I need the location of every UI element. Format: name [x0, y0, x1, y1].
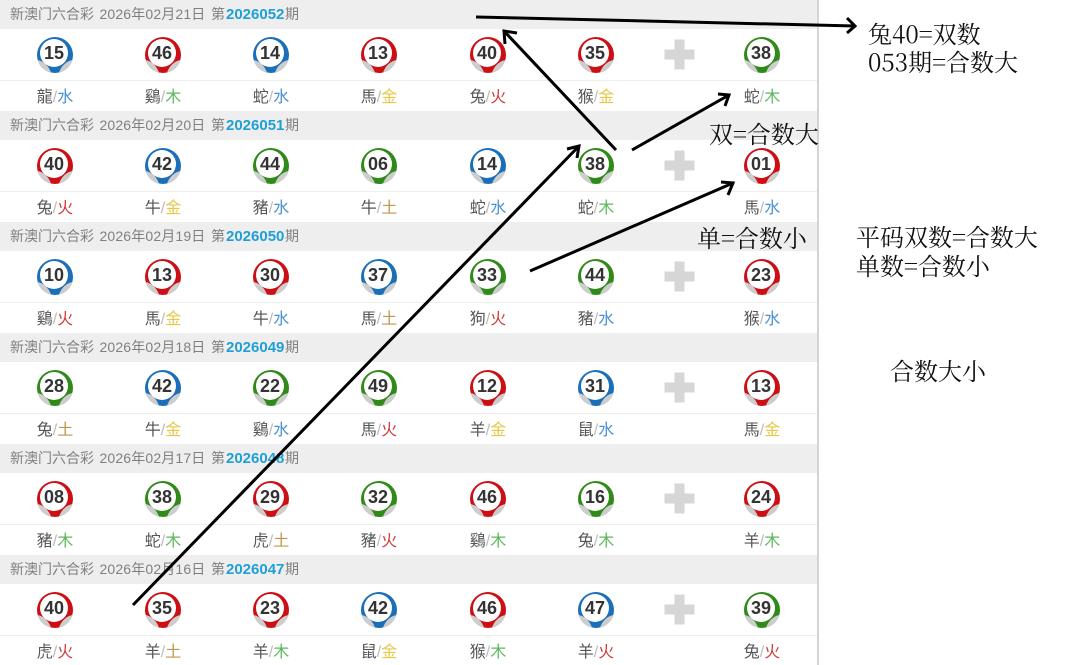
header 2026048: 2026048 — [226, 450, 284, 467]
ball 28 — [37, 370, 73, 439]
header 2026047 — [0, 555, 817, 584]
header 2026047: 期 — [285, 561, 299, 577]
plus icon — [664, 40, 694, 70]
ball 46: 46 — [477, 598, 497, 618]
header 2026052: 2026年02月21日 — [100, 6, 205, 22]
special ball 24: 羊/木 — [744, 532, 780, 550]
ball 13 — [145, 259, 181, 328]
ball 14: 蛇/水 — [253, 88, 289, 106]
arrow: 38 to special 38 — [632, 94, 729, 150]
ball 31: 31 — [585, 376, 605, 396]
ball 15: 15 — [44, 43, 64, 63]
ball 08: 豬/木 — [37, 532, 73, 550]
ball 44: 44 — [260, 154, 280, 174]
ball 30: 30 — [260, 265, 280, 285]
ball 46: 46 — [152, 43, 172, 63]
ball 13 — [361, 37, 397, 106]
header 2026049: 2026049 — [226, 339, 284, 356]
plus icon — [664, 262, 694, 292]
ball 38 — [145, 481, 181, 550]
ball 38 — [578, 148, 614, 217]
ball 14: 蛇/水 — [470, 199, 506, 217]
ball 06: 牛/土 — [361, 199, 397, 217]
ball 40 — [470, 37, 506, 106]
ball 40 — [37, 592, 73, 661]
arrow: header to note — [476, 17, 855, 33]
special ball 39: 39 — [751, 598, 771, 618]
ball 30: 牛/水 — [253, 310, 289, 328]
ball 46: 猴/木 — [470, 643, 506, 661]
ball 40 — [37, 148, 73, 217]
special ball 39: 兔/火 — [744, 643, 780, 661]
note: 双: 双=合数大 — [709, 115, 819, 150]
draw row 2026049 — [0, 333, 817, 439]
ball 49: 馬/火 — [361, 422, 397, 439]
ball 42: 42 — [152, 154, 172, 174]
ball 22: 鷄/水 — [253, 421, 289, 439]
ball 14 — [253, 37, 289, 106]
ball 46 — [470, 481, 506, 550]
ball 10: 10 — [44, 265, 64, 285]
ball 14 — [470, 148, 506, 217]
special ball 01: 馬/水 — [744, 199, 780, 217]
ball 37: 馬/土 — [361, 310, 397, 328]
ball 38: 蛇/木 — [578, 199, 614, 217]
ball 08: 08 — [44, 487, 64, 507]
ball 22 — [253, 370, 289, 439]
ball 42 — [361, 592, 397, 661]
right panel divider — [817, 0, 819, 665]
header 2026048 — [0, 444, 817, 473]
ball 42: 牛/金 — [145, 199, 181, 217]
ball 47: 47 — [585, 598, 605, 618]
ball 23: 羊/木 — [253, 643, 289, 661]
header 2026051: 2026年02月20日 — [100, 117, 205, 133]
ball 35: 35 — [152, 598, 172, 618]
special ball 23 — [744, 259, 780, 328]
ball 37 — [361, 259, 397, 328]
header 2026051: 新澳门六合彩 — [10, 117, 94, 133]
ball 12: 12 — [477, 376, 497, 396]
ball 44: 豬/水 — [578, 310, 614, 328]
arrow: 33 to 01 — [530, 182, 733, 271]
ball 40: 40 — [477, 43, 497, 63]
ball 40: 虎/火 — [37, 643, 73, 661]
ball 44: 豬/水 — [253, 199, 289, 217]
ball 38: 蛇/木 — [145, 532, 181, 550]
draw row 2026051 — [0, 111, 817, 217]
header 2026052: 第 — [211, 6, 225, 22]
special ball 24: 24 — [751, 487, 771, 507]
special ball 38: 38 — [751, 43, 771, 63]
ball 13: 馬/金 — [145, 310, 181, 328]
ball 15 — [37, 37, 73, 106]
plus icon — [664, 150, 694, 180]
ball 42 — [145, 148, 181, 217]
plus icon — [664, 484, 694, 514]
special ball 23: 23 — [751, 265, 771, 285]
ball 42: 鼠/金 — [361, 643, 397, 661]
header 2026052: 2026052 — [226, 6, 284, 23]
ball 46: 46 — [477, 487, 497, 507]
ball 16: 兔/木 — [578, 532, 614, 550]
draw row 2026048 — [0, 444, 817, 550]
header 2026050 — [0, 222, 817, 251]
ball 15: 龍/水 — [37, 88, 73, 106]
ball 40: 兔/火 — [37, 199, 73, 217]
header 2026050: 新澳门六合彩 — [10, 228, 94, 244]
header 2026050: 第 — [211, 228, 225, 244]
ball 42: 42 — [152, 376, 172, 396]
plus icon — [664, 372, 694, 402]
ball 46 — [145, 37, 181, 106]
draw row 2026050 — [0, 222, 817, 328]
ball 13: 13 — [368, 43, 388, 63]
ball 10: 鷄/火 — [37, 310, 73, 328]
ball 14: 14 — [260, 43, 280, 63]
ball 08 — [37, 481, 73, 550]
note: 平码双数: 平码双数=合数大 — [856, 218, 1038, 253]
header 2026049: 2026年02月18日 — [100, 339, 205, 355]
header 2026052: 新澳门六合彩 — [10, 6, 94, 22]
ball 12: 羊/金 — [470, 421, 506, 439]
special ball 13: 馬/金 — [744, 421, 780, 439]
header 2026049: 第 — [211, 339, 225, 355]
note: 兔40: 兔40=双数 — [868, 15, 981, 50]
special ball 24 — [744, 481, 780, 550]
ball 32: 豬/火 — [361, 532, 397, 550]
ball 46: 鷄/木 — [145, 88, 181, 106]
ball 28: 兔/土 — [37, 421, 73, 439]
special ball 38 — [744, 37, 780, 106]
ball 42 — [145, 370, 181, 439]
ball 13: 馬/金 — [361, 88, 397, 106]
note: 单数: 单数=合数小 — [856, 247, 991, 282]
header 2026050: 2026050 — [226, 228, 284, 245]
header 2026052: 期 — [285, 6, 299, 22]
header 2026049 — [0, 333, 817, 362]
ball 30 — [253, 259, 289, 328]
ball 35: 35 — [585, 43, 605, 63]
ball 38: 38 — [152, 487, 172, 507]
ball 23 — [253, 592, 289, 661]
special ball 38: 蛇/木 — [744, 88, 780, 106]
header 2026048: 新澳门六合彩 — [10, 450, 94, 466]
header 2026051: 2026051 — [226, 117, 284, 134]
header 2026047: 第 — [211, 561, 225, 577]
ball 31: 鼠/水 — [578, 421, 614, 439]
draw row 2026047 — [0, 555, 817, 661]
special ball 01: 01 — [751, 154, 771, 174]
ball 28: 28 — [44, 376, 64, 396]
ball 42: 牛/金 — [145, 421, 181, 439]
ball 06: 06 — [368, 154, 388, 174]
header 2026047: 新澳门六合彩 — [10, 561, 94, 577]
ball 13: 13 — [152, 265, 172, 285]
header 2026051 — [0, 111, 817, 140]
special ball 13: 13 — [751, 376, 771, 396]
ball 44 — [253, 148, 289, 217]
ball 22: 22 — [260, 376, 280, 396]
draw row 2026052 — [0, 0, 817, 106]
ball 46 — [470, 592, 506, 661]
header 2026051: 期 — [285, 117, 299, 133]
ball 47 — [578, 592, 614, 661]
special ball 23: 猴/水 — [744, 310, 780, 328]
ball 31 — [578, 370, 614, 439]
arrow: 35 to 38 — [133, 146, 579, 605]
ball 46: 鷄/木 — [470, 532, 506, 550]
ball 29: 虎/土 — [253, 532, 289, 550]
header 2026049: 期 — [285, 339, 299, 355]
ball 35: 猴/金 — [578, 88, 614, 106]
ball 32 — [361, 481, 397, 550]
ball 14: 14 — [477, 154, 497, 174]
header 2026047: 2026047 — [226, 561, 284, 578]
ball 23: 23 — [260, 598, 280, 618]
header 2026050: 2026年02月19日 — [100, 228, 205, 244]
ball 10 — [37, 259, 73, 328]
ball 29: 29 — [260, 487, 280, 507]
special ball 39 — [744, 592, 780, 661]
header 2026047: 2026年02月16日 — [100, 561, 205, 577]
ball 35: 羊/土 — [145, 643, 181, 661]
ball 33: 狗/火 — [470, 310, 506, 328]
arrow: 38 to 40 — [504, 31, 616, 150]
ball 06 — [361, 148, 397, 217]
ball 49: 49 — [368, 376, 388, 396]
note: 合数大小: 合数大小 — [890, 352, 987, 387]
ball 42: 42 — [368, 598, 388, 618]
ball 29 — [253, 481, 289, 550]
ball 35 — [578, 37, 614, 106]
ball 47: 羊/火 — [578, 643, 614, 661]
header 2026048: 2026年02月17日 — [100, 450, 205, 466]
ball 16: 16 — [585, 487, 605, 507]
ball 37: 37 — [368, 265, 388, 285]
header 2026051: 第 — [211, 117, 225, 133]
header 2026048: 期 — [285, 450, 299, 466]
ball 49 — [361, 370, 397, 439]
ball 44: 44 — [585, 265, 605, 285]
ball 40: 兔/火 — [470, 88, 506, 106]
ball 40: 40 — [44, 154, 64, 174]
note: 单: 单=合数小 — [697, 219, 808, 254]
ball 44 — [578, 259, 614, 328]
ball 32: 32 — [368, 487, 388, 507]
note: 053期: 053期=合数大 — [868, 43, 1018, 78]
ball 38: 38 — [585, 154, 605, 174]
ball 33 — [470, 259, 506, 328]
ball 40: 40 — [44, 598, 64, 618]
ball 35 — [145, 592, 181, 661]
header 2026048: 第 — [211, 450, 225, 466]
ball 16 — [578, 481, 614, 550]
header 2026052 — [0, 0, 817, 29]
header 2026049: 新澳门六合彩 — [10, 339, 94, 355]
ball 33: 33 — [477, 265, 497, 285]
plus icon — [664, 594, 694, 624]
special ball 01 — [744, 148, 780, 217]
header 2026050: 期 — [285, 228, 299, 244]
ball 12 — [470, 370, 506, 439]
special ball 13 — [744, 370, 780, 439]
